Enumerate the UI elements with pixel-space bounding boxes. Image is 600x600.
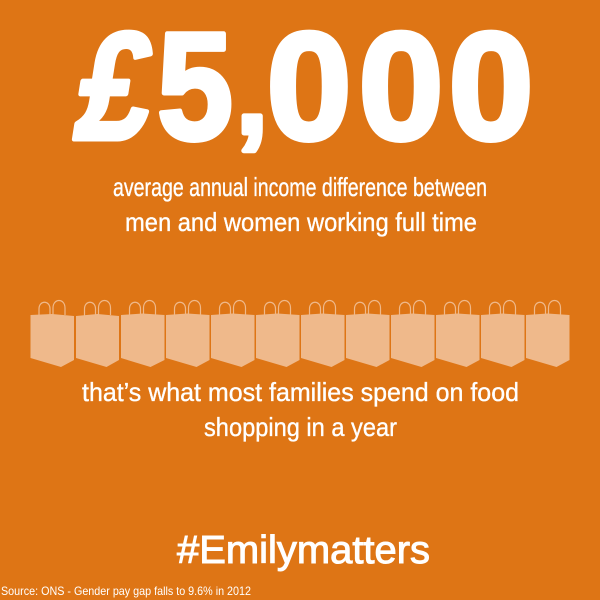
headline figure: £5,000: 0	[266, 1, 352, 172]
text: income difference description: average annual income difference between	[113, 172, 487, 202]
headline figure: £5,000	[67, 1, 534, 172]
text: income difference description: men and women working full time	[125, 207, 477, 237]
headline figure: £5,000: 0	[448, 1, 534, 172]
headline figure: £5,000: ,	[236, 30, 268, 158]
text: food shopping comparison	[82, 377, 519, 442]
headline figure: £5,000: 0	[358, 1, 444, 172]
icon: shopping bag 12	[526, 300, 570, 367]
icon: shopping bag 7	[301, 300, 344, 367]
icon: shopping bag 2	[76, 300, 119, 367]
icon: shopping bag 6	[256, 300, 300, 367]
headline figure: £5,000: 5	[157, 1, 233, 172]
icon: shopping bag 5	[211, 300, 254, 367]
icon: shopping bag 9	[391, 300, 434, 367]
icon: shopping bag 3	[121, 300, 164, 367]
text: food shopping comparison: shopping in a year	[204, 412, 397, 442]
headline figure: £5,000: £	[67, 1, 166, 172]
source note: Source: ONS - Gender pay gap falls to 9.6% in 2012	[1, 584, 251, 598]
text: income difference description	[113, 172, 487, 237]
icon: shopping bag 1	[30, 300, 74, 367]
icon: shopping bag 11	[481, 300, 524, 367]
icon: shopping bag 10	[436, 300, 480, 367]
icon: shopping bag 4	[166, 300, 210, 367]
row of twelve shopping bags	[30, 300, 570, 367]
hashtag: #Emilymatters: #Emilymatters	[177, 529, 430, 572]
text: food shopping comparison: that’s what most families spend on food	[82, 377, 519, 407]
icon: shopping bag 8	[346, 300, 390, 367]
